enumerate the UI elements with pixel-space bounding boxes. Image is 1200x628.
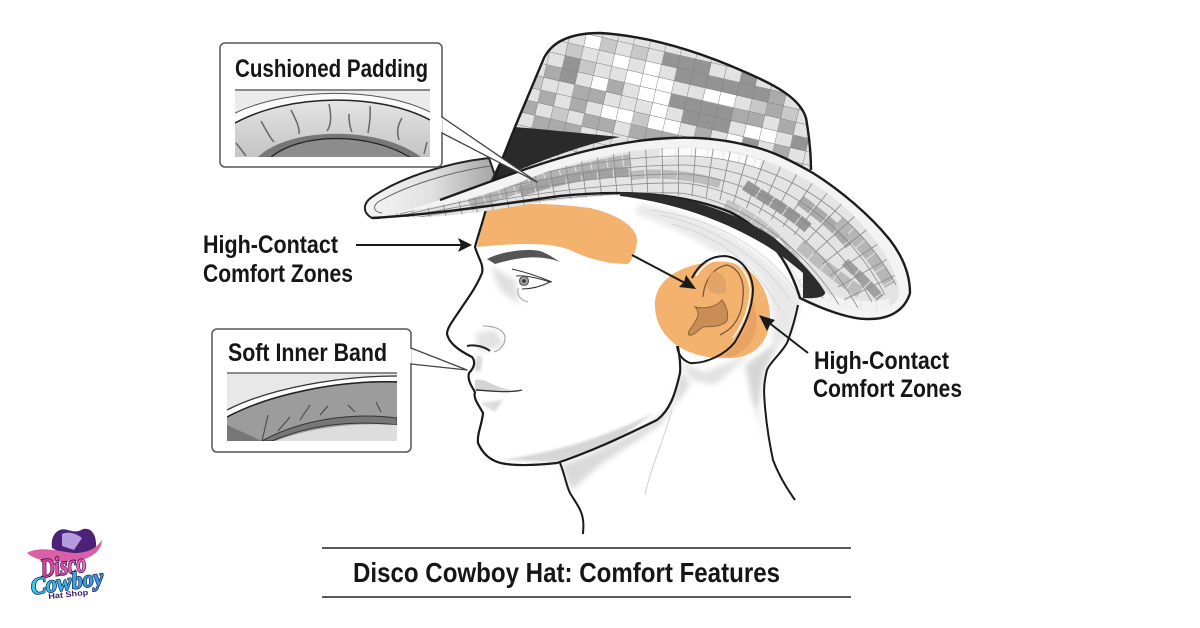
arrow: to forehead: [356, 238, 472, 252]
crown outline: [494, 33, 811, 180]
callout: cushioned padding: [220, 43, 537, 182]
eye: [512, 269, 552, 302]
logo: Hat Shop: [48, 588, 89, 601]
temple hairlines: [650, 210, 798, 310]
head illustration: [447, 204, 802, 534]
arrow: to ear zone: [759, 315, 808, 353]
hat: [365, 23, 915, 330]
ear comfort zone: [655, 262, 770, 358]
ear: [677, 256, 753, 363]
neck crease: [645, 410, 672, 495]
title: Disco Cowboy Hat: Comfort Features: [353, 557, 780, 588]
brim grid cross lines: [380, 168, 875, 300]
hat band: [490, 127, 620, 182]
pointer: [411, 348, 467, 370]
hat left brim underside: [365, 158, 500, 218]
label: high-contact comfort zones left: [203, 231, 353, 288]
under-brim dark band: [620, 192, 825, 298]
arrow: forehead to ear: [632, 255, 696, 289]
neck front line: [560, 463, 583, 534]
heading: Cushioned Padding: [235, 55, 428, 83]
logo: [27, 529, 105, 601]
label: high-contact comfort zones left: Comfort Zones: [203, 260, 353, 288]
logo hat: [52, 529, 96, 554]
brim outline: [372, 138, 910, 319]
lips: [475, 380, 522, 391]
hat brim body: [372, 138, 910, 319]
brim mirror tiles: [387, 148, 899, 310]
label: high-contact comfort zones right: [813, 347, 962, 403]
neck and temple shading: [474, 204, 802, 490]
label: high-contact comfort zones right: Comfort Zones: [813, 375, 962, 403]
neck back line: [764, 305, 798, 500]
logo text: Disco: [38, 548, 88, 584]
callout: soft inner band: [212, 329, 467, 452]
forehead comfort zone: [477, 204, 637, 264]
nose: [467, 326, 505, 352]
heading: Soft Inner Band: [228, 339, 387, 367]
hat crown mirror tiles: [516, 34, 810, 170]
pointer: [442, 117, 537, 182]
label: high-contact comfort zones left: High-Contact: [203, 231, 339, 259]
logo: Cowboy: [29, 565, 105, 601]
brim grid rows: [400, 156, 896, 310]
eyebrow: [487, 250, 560, 264]
padding detail: [235, 91, 430, 158]
label: high-contact comfort zones right: High-Contact: [814, 347, 950, 375]
band detail: [227, 374, 397, 441]
brim dark and light tile patches: [470, 152, 890, 307]
face profile: [447, 205, 680, 465]
